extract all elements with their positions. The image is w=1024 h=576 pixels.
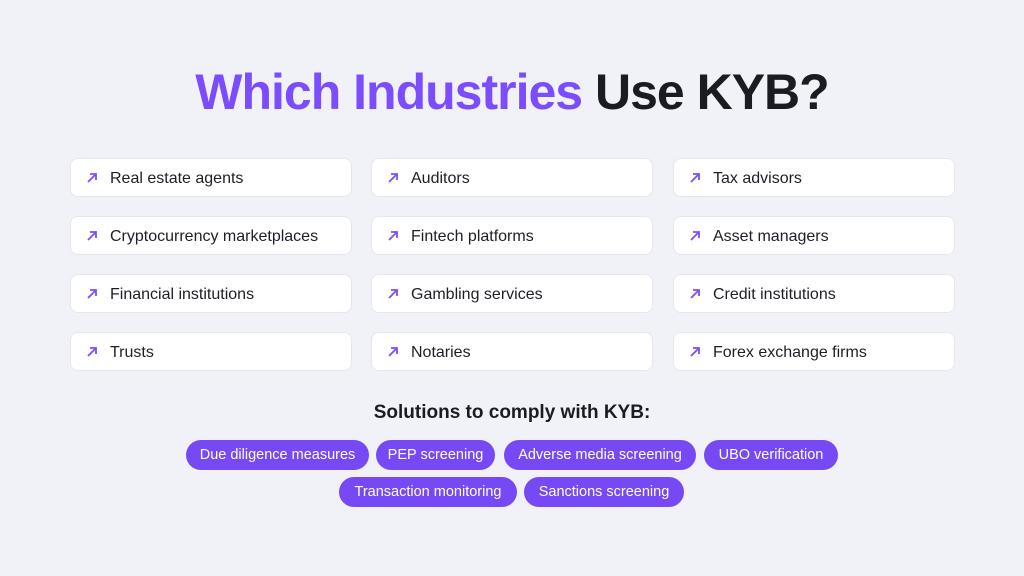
pill: Sanctions screening: Sanctions screening: [539, 484, 669, 500]
pill: Adverse media screening: Adverse media screening: [518, 447, 682, 463]
card: Cryptocurrency marketplaces: Cryptocurrency marketplaces: [110, 228, 318, 245]
card: Notaries: [371, 332, 653, 371]
card: Credit institutions: [673, 274, 955, 313]
card: Financial institutions: [70, 274, 352, 313]
pill: Adverse media screening: [504, 440, 696, 470]
card: Fintech platforms: [371, 216, 653, 255]
card: Financial institutions: Financial institutions: [110, 286, 254, 303]
card: Real estate agents: Real estate agents: [110, 170, 243, 187]
pill: UBO verification: [704, 440, 838, 470]
pill: Due diligence measures: Due diligence measures: [200, 447, 355, 463]
card: Real estate agents: [70, 158, 352, 197]
card: Auditors: [371, 158, 653, 197]
pill: PEP screening: PEP screening: [388, 447, 483, 463]
card: Gambling services: Gambling services: [411, 286, 543, 303]
card: Asset managers: Asset managers: [713, 228, 829, 245]
card: Notaries: Notaries: [411, 344, 471, 361]
card: Trusts: Trusts: [110, 344, 154, 361]
card: Tax advisors: Tax advisors: [713, 170, 802, 187]
subheading: Solutions to comply with KYB:: [374, 402, 650, 423]
card: Forex exchange firms: [673, 332, 955, 371]
title: Which Industries Use KYB?: [195, 64, 829, 120]
pill: UBO verification: UBO verification: [719, 447, 823, 463]
card: Tax advisors: [673, 158, 955, 197]
card: Fintech platforms: Fintech platforms: [411, 228, 534, 245]
pill: Sanctions screening: [524, 477, 684, 507]
card: Auditors: Auditors: [411, 170, 470, 187]
card: Trusts: [70, 332, 352, 371]
card: Cryptocurrency marketplaces: [70, 216, 352, 255]
pill: Due diligence measures: [186, 440, 369, 470]
card: Asset managers: [673, 216, 955, 255]
pill: PEP screening: [376, 440, 495, 470]
pill: Transaction monitoring: Transaction monitoring: [355, 484, 501, 500]
pill: Transaction monitoring: [339, 477, 517, 507]
card: Credit institutions: Credit institutions: [713, 286, 836, 303]
card: Gambling services: [371, 274, 653, 313]
card: Forex exchange firms: Forex exchange firms: [713, 344, 867, 361]
